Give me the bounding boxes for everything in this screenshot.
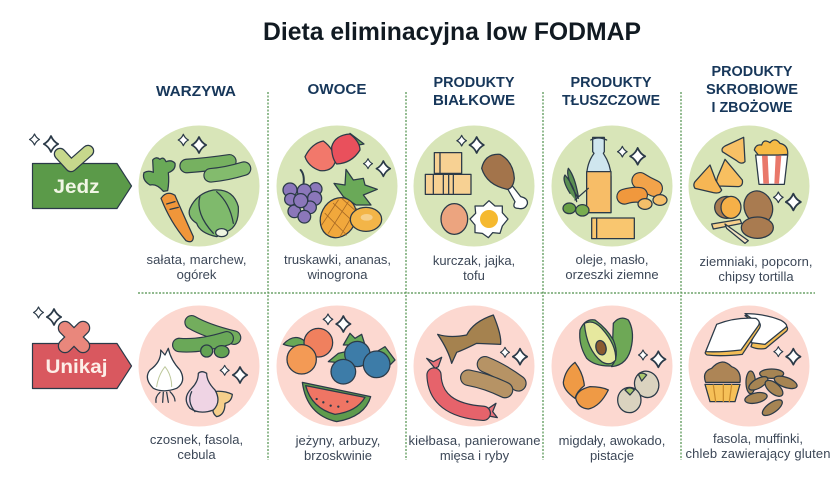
captions: avoid row: chleb zawierający gluten bbox=[686, 446, 830, 461]
captions: eat row: tofu bbox=[463, 268, 485, 283]
captions: avoid row: brzoskwinie bbox=[304, 448, 372, 463]
captions: avoid row: mięsa i ryby bbox=[440, 448, 510, 463]
column headings: SKROBIOWE bbox=[706, 82, 798, 98]
captions: avoid row: cebula bbox=[177, 447, 216, 462]
column headings: PRODUKTY bbox=[712, 64, 793, 80]
column headings bbox=[156, 64, 798, 116]
captions: eat row: truskawki, ananas, bbox=[284, 252, 391, 267]
column headings: BIAŁKOWE bbox=[433, 93, 515, 109]
captions: avoid row: pistacje bbox=[590, 448, 634, 463]
badge: Unikaj bbox=[32, 307, 132, 388]
icon: fruits avoid bbox=[283, 314, 527, 422]
icon: vegetables eat bbox=[143, 134, 244, 242]
captions: eat row: ziemniaki, popcorn, bbox=[700, 254, 812, 269]
title: Dieta eliminacyjna low FODMAP bbox=[263, 18, 641, 46]
icon: proteins and fats avoid bbox=[563, 314, 801, 418]
icon: vegetables avoid bbox=[147, 322, 247, 417]
column headings: TŁUSZCZOWE bbox=[562, 93, 660, 109]
captions: eat row: orzeszki ziemne bbox=[565, 267, 659, 282]
captions: avoid row: fasola, muffinki, bbox=[713, 431, 803, 446]
badge: Jedz: Jedz bbox=[54, 177, 100, 198]
captions: avoid row: jeżyny, arbuzy, bbox=[295, 433, 380, 448]
captions: eat row: chipsy tortilla bbox=[718, 269, 794, 284]
column headings: I ZBOŻOWE bbox=[712, 99, 793, 116]
icon: fats eat bbox=[563, 137, 801, 243]
captions: avoid row: czosnek, fasola, bbox=[150, 432, 243, 447]
captions: eat row: kurczak, jajka, bbox=[433, 253, 515, 268]
pink circles bbox=[138, 306, 810, 426]
column headings: WARZYWA bbox=[156, 84, 237, 100]
column headings: PRODUKTY bbox=[434, 75, 515, 91]
captions: eat row: ogórek bbox=[177, 267, 217, 282]
captions: avoid row bbox=[150, 431, 830, 463]
column headings: PRODUKTY bbox=[570, 75, 652, 91]
badge: Jedz bbox=[30, 134, 131, 208]
captions: eat row: winogrona bbox=[306, 267, 368, 282]
captions: eat row bbox=[146, 252, 812, 284]
captions: eat row: oleje, masło, bbox=[576, 252, 648, 267]
captions: avoid row: migdały, awokado, bbox=[559, 433, 665, 448]
captions: eat row: sałata, marchew, bbox=[146, 252, 246, 267]
icon: fruits eat bbox=[283, 133, 527, 244]
captions: avoid row: kiełbasa, panierowane bbox=[408, 433, 540, 448]
green circles bbox=[138, 126, 810, 246]
badge: Unikaj: Unikaj bbox=[46, 357, 108, 378]
column headings: OWOCE bbox=[308, 82, 367, 98]
